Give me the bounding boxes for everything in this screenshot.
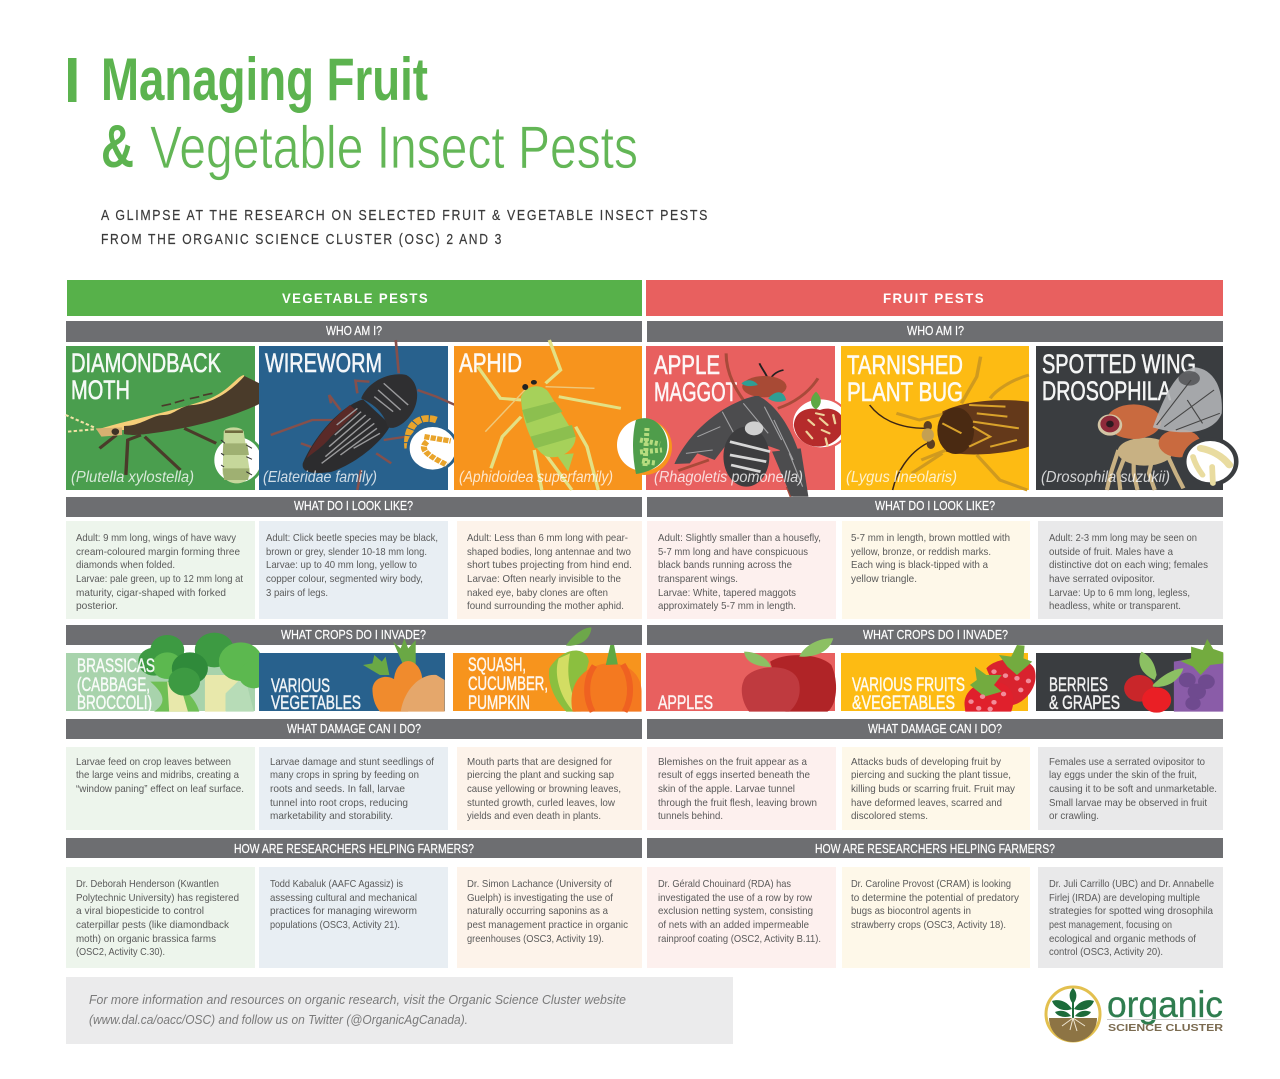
panel: wireworm damage: Larvae damage and stunt seedlings of (270, 756, 434, 768)
panel: wireworm research: populations (OSC3, Activity 21). (270, 919, 400, 931)
panel: aphid damage: Mouth parts that are designed for (467, 756, 612, 768)
panel: apple maggot research: of nets with an added impermeable (658, 919, 809, 931)
header: fruit pests: FRUIT PESTS (883, 290, 985, 306)
panel: drosophila research: control (OSC3, Activity 20). (1049, 946, 1163, 958)
panel: drosophila description: outside of fruit. Males have a (1049, 546, 1173, 558)
panel: wireworm research: practices for managing wireworm (270, 905, 417, 917)
panel: moth description: diamonds when folded. (76, 559, 175, 571)
panel: apple maggot damage: Blemishes on the fruit appear as a (658, 756, 807, 768)
panel: moth description: maturity, cigar-shaped with forked (76, 587, 226, 599)
panel: moth damage: the large veins and midribs, creating a (76, 769, 239, 781)
panel: apple maggot description: black bands running across the (658, 559, 792, 571)
subtitle: A GLIMPSE AT THE RESEARCH ON SELECTED FRUIT & VEGETABLE INSECT PESTS (101, 208, 709, 224)
icon: moth (66, 375, 262, 475)
panel: plant bug description: yellow triangle. (851, 573, 917, 585)
panel: moth description: Larvae: pale green, up to 12 mm long at (76, 573, 243, 585)
tile: tarnished plant bug: (Lygus lineolaris) (846, 469, 957, 486)
header: vegetable pests (67, 280, 642, 316)
panel: apple maggot description: Adult: Slightly smaller than a housefly, (658, 532, 821, 544)
tile: diamondback moth: DIAMONDBACK (71, 348, 221, 378)
crop tile: berries and grapes: & GRAPES (1049, 693, 1120, 714)
panel: drosophila damage: or crawling. (1049, 810, 1099, 822)
panel: apple maggot description: transparent wings. (658, 573, 738, 585)
section bar: crops fruit: WHAT CROPS DO I INVADE? (863, 628, 1008, 642)
panel: drosophila research: ecological and organic methods of (1049, 933, 1196, 945)
panel: wireworm research: assessing cultural and mechanical (270, 892, 417, 904)
crop tile: berries and grapes: BERRIES (1049, 675, 1108, 696)
panel: apple maggot damage: tunnels behind. (658, 810, 723, 822)
panel: plant bug damage: piercing and sucking the plant tissue, (851, 769, 1011, 781)
panel: moth description: Adult: 9 mm long, wings of have wavy (76, 532, 237, 544)
header: vegetable pests: VEGETABLE PESTS (282, 290, 429, 306)
panel: drosophila research (1038, 867, 1223, 968)
crop tile: various fruits and vegetables (841, 645, 1036, 714)
footer note (66, 977, 733, 1044)
title: Vegetable Insect Pests (150, 114, 638, 181)
panel: moth research: (OSC2, Activity C.30). (76, 946, 165, 958)
section bar: researchers vegetable: HOW ARE RESEARCHERS HELPING FARMERS? (234, 842, 474, 856)
panel: aphid damage: piercing the plant and sucking sap (467, 769, 614, 781)
section bar: damage vegetable (66, 719, 642, 739)
panel: aphid research: Dr. Simon Lachance (University of (467, 878, 612, 890)
crop tile: various vegetables (259, 638, 445, 714)
panel: drosophila damage (1038, 747, 1223, 830)
panel: aphid description (457, 521, 642, 619)
tile: diamondback moth: MOTH (71, 375, 130, 405)
panel: aphid research: Guelph) is investigating the use of (467, 892, 613, 904)
panel: wireworm description: Larvae: up to 40 mm long, yellow to (266, 559, 417, 571)
section bar: damage fruit (647, 719, 1223, 739)
panel: plant bug description: yellow, bronze, or reddish marks. (851, 546, 991, 558)
panel: drosophila research: strategies for spotted wing drosophila (1049, 905, 1213, 917)
panel: moth description: posterior. (76, 600, 118, 612)
panel: drosophila description: distinctive dot on each wing; females (1049, 559, 1208, 571)
crop tile: various fruits and vegetables: VARIOUS FRUITS (852, 675, 965, 696)
section bar: crops vegetable (66, 625, 642, 645)
section bar: who am I fruit: WHO AM I? (907, 324, 964, 338)
crop tile: squash cucumber pumpkin: PUMPKIN (468, 693, 530, 714)
panel: drosophila damage: causing it to be soft and unmarketable. (1049, 783, 1217, 795)
panel: drosophila damage: Small larvae may be observed in fruit (1049, 797, 1207, 809)
panel: wireworm research: Todd Kabaluk (AAFC Agassiz) is (270, 878, 403, 890)
icon: strawberries (964, 645, 1036, 712)
panel: apple maggot research: investigated the use of a row by row (658, 892, 812, 904)
panel: wireworm description: Adult: Click beetle species may be black, (266, 532, 438, 544)
logo: organic science cluster (1046, 984, 1223, 1042)
icon: aphid (478, 340, 621, 490)
footer note: For more information and resources on organic research, visit the Organic Science Cluster website (89, 992, 626, 1007)
logo: organic science cluster: organic (1107, 984, 1223, 1025)
panel: apple maggot description (647, 521, 836, 619)
subtitle: FROM THE ORGANIC SCIENCE CLUSTER (OSC) 2 AND 3 (101, 232, 503, 248)
section bar: researchers fruit (647, 838, 1223, 858)
panel: plant bug damage: discolored stems. (851, 810, 928, 822)
crop tile: apples: APPLES (658, 693, 713, 714)
panel: aphid description: naked eye, baby clones are often (467, 587, 608, 599)
panel: apple maggot research: exclusion netting system, consisting (658, 905, 813, 917)
panel: apple maggot description: Larvae: White, tapered maggots (658, 587, 796, 599)
icon: carrots and potato (363, 638, 445, 712)
panel: apple maggot damage: result of eggs inserted beneath the (658, 769, 810, 781)
section bar: look like vegetable (66, 497, 642, 517)
panel: wireworm damage: tunnel into root crops, reducing (270, 797, 408, 809)
panel: plant bug research (842, 867, 1030, 968)
tile: tarnished plant bug (841, 346, 1029, 490)
panel: wireworm damage: marketability and storability. (270, 810, 393, 822)
icon: leaf damage circle overlapping apple tile (616, 418, 672, 475)
crop tile: brassicas: BROCCOLI) (77, 693, 152, 714)
panel: drosophila description: have serrated ovipositor. (1049, 573, 1155, 585)
section bar: damage vegetable: WHAT DAMAGE CAN I DO? (287, 722, 421, 736)
panel: plant bug description: Each wing is black-tipped with a (851, 559, 988, 571)
panel: drosophila description: Larvae: Up to 6 mm long, legless, (1049, 587, 1190, 599)
section bar: damage fruit: WHAT DAMAGE CAN I DO? (868, 722, 1002, 736)
icon: broccoli (138, 633, 269, 712)
panel: plant bug research: to determine the potential of predatory (851, 892, 1020, 904)
crop tile: various vegetables: VARIOUS (271, 676, 330, 697)
crop tile: apples (646, 638, 836, 714)
panel: wireworm damage: many crops in spring by feeding on (270, 769, 419, 781)
section bar: researchers fruit: HOW ARE RESEARCHERS HELPING FARMERS? (815, 842, 1055, 856)
crop tile: berries and grapes (1036, 639, 1223, 714)
panel: apple maggot damage: through the fruit flesh, leaving brown (658, 797, 817, 809)
panel: moth research (66, 867, 255, 968)
panel: plant bug description: 5-7 mm in length, brown mottled with (851, 532, 1010, 544)
panel: moth research: caterpillar pests (like diamondback (76, 919, 230, 931)
panel: plant bug research: strawberry crops (OSC3, Activity 18). (851, 919, 1006, 931)
panel: aphid description: Adult: Less than 6 mm long with pear- (467, 532, 628, 544)
panel: wireworm description: brown or grey, slender 10-18 mm long. (266, 546, 427, 558)
icon: berries and grapes (1124, 639, 1223, 713)
panel: drosophila research: pest management, focusing on (1049, 919, 1172, 931)
panel: apple maggot description: 5-7 mm long and have conspicuous (658, 546, 808, 558)
tile: apple maggot: APPLE (654, 350, 720, 380)
tile: spotted wing drosophila: SPOTTED WING (1042, 349, 1196, 379)
panel: apple maggot damage: skin of the apple. Larvae tunnel (658, 783, 795, 795)
section bar: who am I vegetable (66, 321, 642, 342)
panel: plant bug damage: Attacks buds of developing fruit by (851, 756, 1002, 768)
panel: moth description: cream-coloured margin forming three (76, 546, 240, 558)
tile: apple maggot (646, 346, 849, 497)
title (68, 46, 638, 181)
panel: wireworm description (259, 521, 448, 619)
section bar: crops vegetable: WHAT CROPS DO I INVADE? (281, 628, 426, 642)
icon: moth larva (213, 427, 263, 484)
panel: drosophila research: Firlej (IRDA) are developing multiple (1049, 892, 1200, 904)
tile: apple maggot: MAGGOT (654, 377, 737, 407)
panel: plant bug damage (842, 747, 1030, 830)
panel: aphid description: short tubes projecting from hind end. (467, 559, 632, 571)
section bar: look like fruit (647, 497, 1223, 517)
tile: aphid: (Aphidoidea superfamily) (459, 469, 613, 486)
crop tile: various vegetables: VEGETABLES (271, 693, 361, 714)
panel: wireworm research (259, 867, 448, 968)
subtitle (101, 208, 709, 248)
tile: diamondback moth (66, 346, 263, 490)
panel: moth damage: “window paning” effect on leaf surface. (76, 783, 244, 795)
panel: wireworm damage: roots and seeds. In fall, larvae (270, 783, 405, 795)
panel: apple maggot research (647, 867, 836, 968)
panel: drosophila damage: Females use a serrated ovipositor to (1049, 756, 1205, 768)
panel: moth research: Polytechnic University) has registered (76, 892, 239, 904)
panel: apple maggot description: approximately 5-7 mm in length. (658, 600, 796, 612)
icon: apple maggot fly (674, 353, 818, 497)
panel: aphid research: naturally occurring saponins as a (467, 905, 608, 917)
panel: wireworm description: copper colour, segmented wiry body, (266, 573, 423, 585)
crop tile: various fruits and vegetables: &VEGETABLES (852, 693, 955, 714)
crop tile: brassicas: (CABBAGE, (77, 675, 150, 696)
panel: aphid research: greenhouses (OSC3, Activity 19). (467, 933, 604, 945)
panel: aphid description: shaped bodies, long antennae and two (467, 546, 631, 558)
panel: moth research: a viral biopesticide to control (76, 905, 204, 917)
panel: drosophila description: Adult: 2-3 mm long may be seen on (1049, 532, 1197, 544)
tile: wireworm: (Elateridae family) (263, 469, 377, 486)
panel: moth damage: Larvae feed on crop leaves between (76, 756, 231, 768)
tile: aphid (454, 340, 642, 490)
panel: plant bug research: Dr. Caroline Provost (CRAM) is looking (851, 878, 1011, 890)
panel: moth research: Dr. Deborah Henderson (Kwantlen (76, 878, 219, 890)
panel: moth damage (66, 747, 255, 830)
icon: click beetle (271, 340, 470, 490)
panel: aphid research (457, 867, 642, 968)
tile: tarnished plant bug: TARNISHED (847, 350, 963, 380)
crop tile: brassicas (66, 633, 269, 714)
panel: drosophila description (1038, 521, 1223, 619)
tile: diamondback moth: (Plutella xylostella) (71, 469, 194, 486)
panel: plant bug description (842, 521, 1030, 619)
tile: tarnished plant bug: PLANT BUG (847, 377, 963, 407)
panel: plant bug damage: killing buds or scarring fruit. Fruit may (851, 783, 1016, 795)
panel: drosophila description: headless, white or transparent. (1049, 600, 1181, 612)
title: & (101, 113, 134, 180)
icon: apple with maggots (792, 392, 849, 448)
icon: drosophila larvae (1184, 439, 1236, 484)
crop tile: squash cucumber pumpkin (453, 628, 642, 714)
panel: aphid damage: yields and even death in plants. (467, 810, 601, 822)
panel: aphid research: pest management practice in organic (467, 919, 628, 931)
icon: squash and pumpkin (549, 628, 642, 712)
crop tile: squash cucumber pumpkin: SQUASH, (468, 655, 526, 676)
section bar: look like vegetable: WHAT DO I LOOK LIKE? (294, 499, 413, 513)
panel: apple maggot research: Dr. Gérald Chouinard (RDA) has (658, 878, 791, 890)
tile: apple maggot: (Rhagoletis pomonella) (654, 469, 803, 486)
title: Managing Fruit (101, 46, 428, 113)
panel: aphid description: Larvae: Often nearly invisible to the (467, 573, 621, 585)
icon: wireworm larva (408, 419, 457, 471)
logo: organic science cluster: SCIENCE CLUSTER (1108, 1022, 1223, 1034)
header: fruit pests (646, 280, 1223, 316)
crop tile: brassicas: BRASSICAS (77, 656, 155, 677)
panel: moth description (66, 521, 255, 619)
crop tile: squash cucumber pumpkin: CUCUMBER, (468, 674, 548, 695)
section bar: who am I vegetable: WHO AM I? (326, 324, 382, 338)
panel: aphid description: found surrounding the mother aphid. (467, 600, 624, 612)
panel: apple maggot damage (647, 747, 836, 830)
panel: plant bug damage: have deformed leaves, scarred and (851, 797, 1002, 809)
panel: aphid damage: stunted growth, curled leaves, low (467, 797, 615, 809)
icon: apples (742, 638, 836, 712)
tile: wireworm (259, 340, 470, 490)
icon: logo emblem (1046, 987, 1100, 1042)
section bar: researchers vegetable (66, 838, 642, 858)
section bar: who am I fruit (647, 321, 1223, 342)
footer note: (www.dal.ca/oacc/OSC) and follow us on Twitter (@OrganicAgCanada). (89, 1012, 468, 1027)
tile: spotted wing drosophila: (Drosophila suzukii) (1041, 469, 1170, 486)
tile: aphid: APHID (459, 348, 522, 378)
panel: drosophila research: Dr. Juli Carrillo (UBC) and Dr. Annabelle (1049, 878, 1214, 890)
panel: wireworm description: 3 pairs of legs. (266, 587, 328, 599)
section bar: crops fruit (647, 625, 1223, 645)
panel: drosophila damage: lay eggs under the skin of the fruit, (1049, 769, 1197, 781)
panel: apple maggot research: rainproof coating (OSC2, Activity B.11). (658, 933, 821, 945)
panel: moth research: moth) on organic brassica farms (76, 933, 216, 945)
tile: spotted wing drosophila: DROSOPHILA (1042, 376, 1171, 406)
icon: drosophila fly (1098, 367, 1222, 490)
tile: spotted wing drosophila (1036, 346, 1236, 490)
icon: plant bug (870, 357, 1029, 490)
section bar: look like fruit: WHAT DO I LOOK LIKE? (875, 499, 995, 513)
panel: aphid damage: cause yellowing or browning leaves, (467, 783, 621, 795)
panel: aphid damage (457, 747, 642, 830)
panel: plant bug research: bugs as biocontrol agents in (851, 905, 971, 917)
tile: wireworm: WIREWORM (265, 348, 382, 378)
panel: wireworm damage (259, 747, 448, 830)
